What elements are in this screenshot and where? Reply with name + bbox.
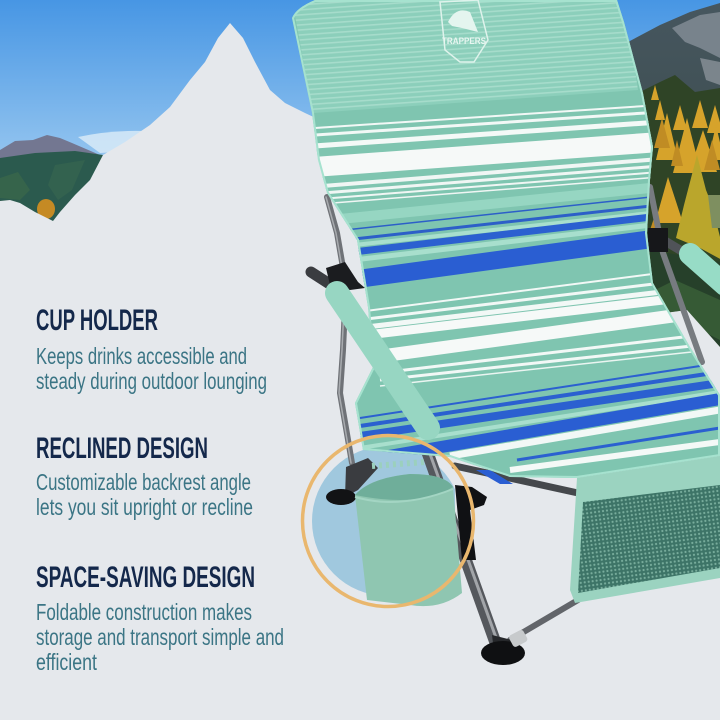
logo badge: TRAPPERS xyxy=(442,36,486,46)
yellow larch trees xyxy=(651,85,720,223)
description: lets you sit upright or recline xyxy=(36,494,253,520)
headrest panel xyxy=(292,0,638,113)
right side clamp xyxy=(648,228,668,252)
distant mountain left xyxy=(0,135,100,170)
cup holder callout xyxy=(302,436,487,606)
orange ring xyxy=(302,436,474,606)
green shrubs xyxy=(655,280,720,340)
right rear frame xyxy=(650,187,702,362)
left rear frame xyxy=(327,197,352,463)
cup holder xyxy=(355,474,462,606)
description: storage and transport simple and xyxy=(36,624,284,650)
clamp behind cup xyxy=(455,485,487,560)
blue highlight circle xyxy=(312,446,462,596)
chair legs and frame xyxy=(311,187,702,647)
tall yellow tree right xyxy=(676,155,720,260)
front leg xyxy=(423,440,497,647)
pocket xyxy=(570,456,720,603)
rear foot and bracket xyxy=(326,458,378,505)
left arm tube xyxy=(311,272,342,292)
description xyxy=(36,469,253,520)
description: Keeps drinks accessible and xyxy=(36,343,247,369)
description xyxy=(36,343,267,394)
logo badge xyxy=(440,0,488,62)
seat stripes xyxy=(360,366,720,470)
feature: cup holder xyxy=(36,304,267,394)
heading: RECLINED DESIGN xyxy=(36,432,208,465)
left armrest xyxy=(337,293,428,428)
right clamp tube xyxy=(660,238,690,256)
right armrest xyxy=(690,254,720,285)
background: sky photo xyxy=(0,0,720,260)
feature: reclined design xyxy=(36,432,253,520)
forest left xyxy=(0,151,103,225)
foot brace xyxy=(510,600,578,640)
lake patch xyxy=(708,195,720,228)
blue strap under seat xyxy=(476,470,513,484)
description: Customizable backrest angle xyxy=(36,469,251,495)
thin cloud xyxy=(78,131,145,153)
heading: CUP HOLDER xyxy=(36,304,158,337)
description xyxy=(36,599,284,675)
autumn tree left xyxy=(37,199,55,219)
feature: space-saving design xyxy=(36,561,284,675)
heading: SPACE-SAVING DESIGN xyxy=(36,561,255,594)
description: Foldable construction makes xyxy=(36,599,252,625)
front foot xyxy=(481,629,528,665)
back stripes xyxy=(300,105,710,386)
chair fabric xyxy=(292,0,720,478)
description: steady during outdoor lounging xyxy=(36,368,267,394)
seat cord xyxy=(372,462,425,466)
background: right mountain and autumn forest xyxy=(628,3,720,350)
mid brace xyxy=(455,466,578,493)
description: efficient xyxy=(36,649,97,675)
left side clamp xyxy=(326,262,365,290)
